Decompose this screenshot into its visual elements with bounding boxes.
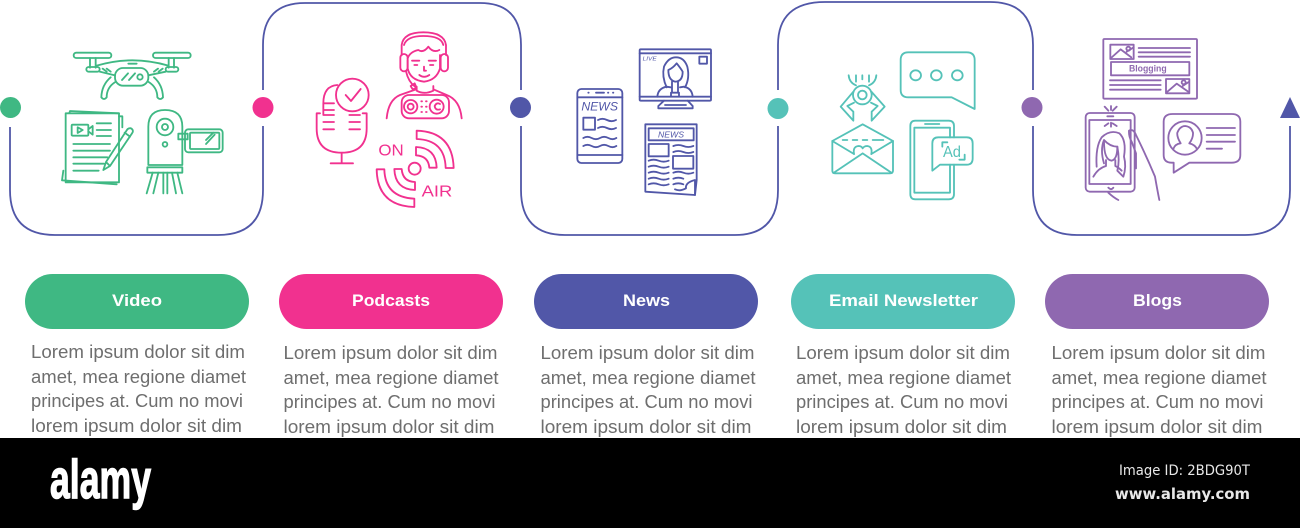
timeline connector <box>10 2 1290 235</box>
icon group: podcasts <box>317 32 462 207</box>
description: blogs: principes at. Cum no movi <box>1052 392 1264 412</box>
icon: microphone with check <box>317 79 369 163</box>
icon: on air sign <box>377 131 454 207</box>
description: podcasts: lorem ipsum dolor sit dim <box>284 417 494 437</box>
watermark footer bar <box>0 438 1300 528</box>
step pill: video: Video <box>112 291 162 310</box>
step pill: podcasts: Podcasts <box>352 291 430 310</box>
description: email newsletter <box>796 343 1011 437</box>
description: video: Lorem ipsum dolor sit dim <box>31 342 245 362</box>
image id: Image ID: 2BDG90T <box>1119 463 1250 479</box>
step pill: video <box>25 274 249 329</box>
icon: on air sign: ON <box>378 142 404 159</box>
description: email newsletter: principes at. Cum no movi <box>796 392 1008 412</box>
icon: on air sign: AIR <box>422 183 452 200</box>
icon: live television: LIVE <box>643 57 657 63</box>
step pill: email newsletter <box>791 274 1015 329</box>
icon: envelope with heart <box>832 124 893 173</box>
description: news: Lorem ipsum dolor sit dim <box>540 343 754 363</box>
description: news <box>540 343 756 437</box>
description: email newsletter: amet, mea regione diamet <box>796 368 1011 388</box>
alamy logo: alamy <box>50 448 151 510</box>
icon group: email newsletter <box>832 52 975 199</box>
icon: live television <box>640 49 711 108</box>
description: email newsletter: Lorem ipsum dolor sit dim <box>796 343 1010 363</box>
timeline dot: podcasts <box>252 97 274 118</box>
icon: tablet and hand <box>1086 106 1159 200</box>
icon: blogging web page: Blogging <box>1129 64 1167 74</box>
icon group: blogs <box>1086 39 1240 200</box>
icon: phone with ad: Ad <box>943 144 961 161</box>
description: podcasts: principes at. Cum no movi <box>284 392 496 412</box>
description: news: amet, mea regione diamet <box>540 368 756 388</box>
description: video: principes at. Cum no movi <box>31 391 243 411</box>
timeline dot: email newsletter <box>768 98 788 119</box>
description: podcasts <box>284 343 498 437</box>
description: email newsletter: lorem ipsum dolor sit dim <box>796 417 1007 437</box>
step pill: news: News <box>623 291 670 310</box>
description: blogs: Lorem ipsum dolor sit dim <box>1052 343 1266 363</box>
icon: newspaper <box>645 124 697 195</box>
description: video: amet, mea regione diamet <box>31 367 246 387</box>
icon: script with pencil <box>62 111 133 184</box>
timeline dot: news <box>510 97 531 118</box>
description: news: lorem ipsum dolor sit dim <box>540 417 752 437</box>
icon group: news <box>577 49 711 195</box>
icon: speech bubble <box>901 52 975 109</box>
icon: robotic claw <box>841 75 885 121</box>
icon group: video <box>62 53 223 193</box>
icon: phone with ad <box>910 121 973 199</box>
description: podcasts: Lorem ipsum dolor sit dim <box>284 343 498 363</box>
step pill: podcasts <box>279 274 503 329</box>
arrowhead <box>1280 97 1300 118</box>
description: video: lorem ipsum dolor sit dim <box>31 416 242 436</box>
step pill: news <box>534 274 758 329</box>
step pill: blogs <box>1045 274 1269 329</box>
website: www.alamy.com <box>1115 485 1250 503</box>
icon: camcorder on tripod <box>147 110 223 193</box>
icon: blogging web page <box>1103 39 1197 99</box>
icon: newspaper: NEWS <box>658 130 685 139</box>
icon: news on smartphone: NEWS <box>581 99 618 113</box>
description: blogs: amet, mea regione diamet <box>1052 368 1266 388</box>
description: blogs: lorem ipsum dolor sit dim <box>1052 417 1262 437</box>
description: podcasts: amet, mea regione diamet <box>284 368 498 388</box>
step pill: blogs: Blogs <box>1133 291 1182 310</box>
icon: news on smartphone <box>577 89 622 163</box>
step pill: email newsletter: Email Newsletter <box>829 291 978 310</box>
timeline dot: blogs <box>1022 97 1042 118</box>
description: blogs <box>1052 343 1266 437</box>
timeline dot: video <box>0 97 21 118</box>
icon: podcaster with headset <box>387 32 462 118</box>
description: news: principes at. Cum no movi <box>540 392 752 412</box>
icon: drone <box>74 53 191 99</box>
description: video <box>31 342 246 436</box>
icon: profile message bubble <box>1164 114 1240 173</box>
